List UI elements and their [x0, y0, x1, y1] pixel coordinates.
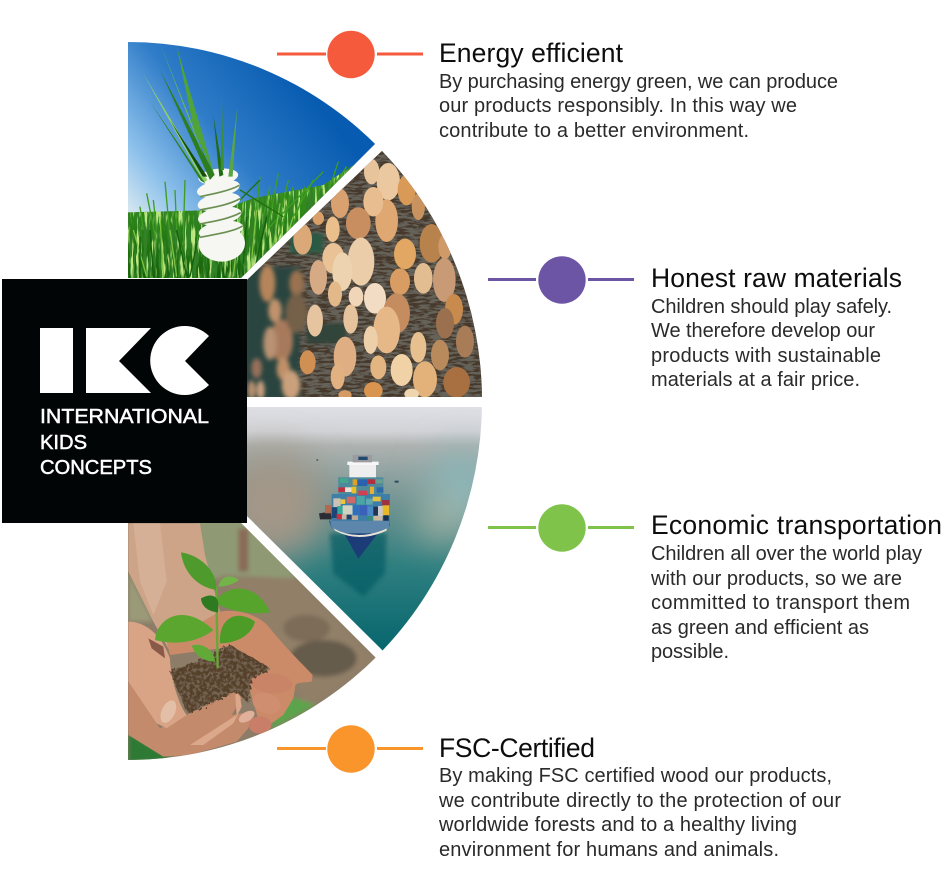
text block: FSC-certified: environment for humans and animals. [439, 839, 779, 861]
containers [338, 477, 383, 494]
text block: honest raw materials: materials at a fair price. [651, 369, 860, 391]
text block: FSC-certified: worldwide forests and to a healthy living [438, 814, 797, 836]
bridge [349, 465, 376, 478]
text block: energy efficient: our products responsibly. In this way we [439, 95, 797, 117]
tug boat [319, 512, 332, 519]
text block: honest raw materials: Honest raw materials [651, 263, 902, 293]
text block: FSC-certified: FSC-Certified [439, 733, 595, 763]
blurred left background [243, 233, 347, 400]
text block: economic transportation [650, 510, 942, 663]
ship reflection [330, 533, 387, 597]
text block: economic transportation: possible. [651, 641, 729, 663]
text block: FSC-certified [438, 733, 841, 861]
text block: economic transportation: Children all over the world play [651, 543, 922, 565]
blurred backdrop [128, 515, 380, 763]
soil [170, 645, 270, 713]
text block: economic transportation: with our products, so we are [650, 568, 902, 590]
seedling [216, 587, 218, 668]
text block: economic transportation: Economic transportation [651, 510, 942, 540]
grass field [128, 164, 356, 278]
text block: honest raw materials: We therefore develop our [651, 320, 875, 342]
logo panel [2, 279, 247, 523]
connector: honest raw materials [488, 256, 634, 304]
text block: energy efficient: By purchasing energy green, we can produce [439, 71, 838, 93]
photo: container ship at sea [247, 407, 482, 650]
photo wheel [120, 30, 500, 770]
connector: FSC-certified [277, 725, 423, 773]
background log ends, out of focus [248, 265, 308, 400]
log ends [293, 159, 474, 400]
spiral bulb [196, 167, 245, 262]
photo: stacked timber logs [247, 151, 482, 397]
text block: honest raw materials [651, 263, 902, 391]
logo wordmark: CONCEPTS [40, 457, 152, 479]
text block: energy efficient [439, 38, 838, 142]
logo wordmark [40, 406, 209, 479]
text block: honest raw materials: products with sustainable [651, 345, 881, 367]
text block: FSC-certified: By making FSC certified wood our products, [439, 765, 832, 787]
sea colour patches [217, 450, 497, 560]
text block: economic transportation: committed to transport them [651, 592, 910, 614]
text block: energy efficient: contribute to a better environment. [439, 120, 749, 142]
text block: energy efficient: Energy efficient [439, 38, 624, 68]
tall blades [143, 45, 237, 183]
photo: energy saving bulb in grass [128, 42, 375, 278]
text block: economic transportation: as green and efficient as [651, 617, 869, 639]
hands and arm [128, 523, 313, 757]
photo: seedling in cupped hands [128, 523, 376, 760]
connector: economic transportation [488, 504, 634, 552]
text block: honest raw materials: Children should play safely. [651, 296, 892, 318]
hull [329, 521, 390, 559]
logo mark: IKC [40, 326, 209, 395]
logo wordmark: KIDS [40, 432, 87, 454]
connector: energy efficient [277, 31, 423, 78]
text block: FSC-certified: we contribute directly to the protection of our [438, 790, 841, 812]
logo wordmark: INTERNATIONAL [40, 406, 209, 428]
